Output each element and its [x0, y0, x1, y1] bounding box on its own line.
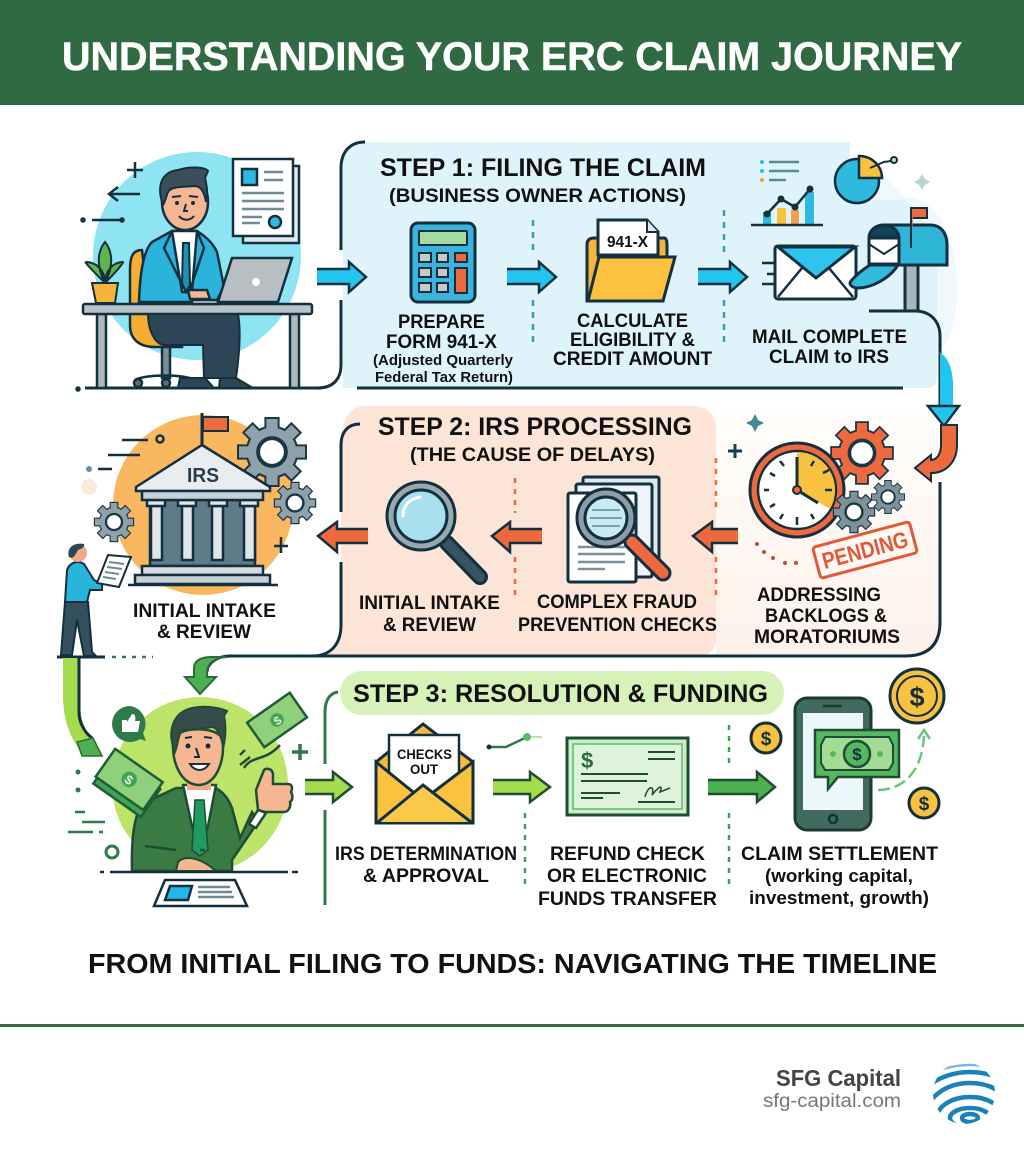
title: UNDERSTANDING YOUR ERC CLAIM JOURNEY	[62, 35, 962, 79]
hand on desk	[176, 858, 216, 871]
label: refund check: REFUND CHECK	[550, 844, 705, 865]
icon: coin left	[751, 723, 781, 753]
label: initial intake middle	[359, 593, 500, 636]
text: step 3: STEP 3: RESOLUTION & FUNDING	[353, 680, 768, 708]
arrow: to IRS	[318, 522, 368, 552]
label: claim settlement: investment, growth)	[749, 888, 929, 908]
cash left	[92, 749, 164, 817]
illustration: person reviewing	[57, 544, 131, 657]
hand and laptop	[188, 258, 292, 304]
sparkle	[914, 174, 930, 190]
label: determination: IRS DETERMINATION	[335, 844, 517, 865]
label: prepare form: PREPARE	[398, 312, 485, 333]
heading: step 1	[380, 154, 706, 207]
heading: step 1: STEP 1: FILING THE CLAIM	[380, 154, 706, 182]
label: calculate eligibility: CREDIT AMOUNT	[553, 349, 712, 370]
label: initial intake left	[133, 601, 276, 643]
label: determination	[335, 844, 517, 887]
label: prepare form: (Adjusted Quarterly	[373, 352, 514, 369]
text: checks out: CHECKS	[397, 746, 452, 762]
step 3 bracket line	[325, 692, 338, 905]
cash right	[247, 693, 307, 747]
tagline: FROM INITIAL FILING TO FUNDS: NAVIGATING THE TIMELINE	[88, 948, 937, 979]
paper	[97, 555, 131, 587]
connector lines step 2	[207, 424, 940, 672]
label: refund check	[538, 844, 717, 910]
heading: step 2	[378, 413, 692, 466]
icon: check	[567, 738, 688, 815]
subheading: step 1: (BUSINESS OWNER ACTIONS)	[389, 185, 686, 207]
icon: big coin	[890, 669, 944, 723]
body	[65, 562, 102, 602]
header banner	[0, 0, 1024, 105]
label: refund check: FUNDS TRANSFER	[538, 889, 717, 910]
logo: globe	[933, 1064, 995, 1124]
brand name	[763, 1065, 901, 1112]
tablet	[154, 880, 247, 906]
text: IRS: IRS	[187, 465, 219, 487]
icon: gray gear lower	[834, 492, 874, 532]
icon: envelope with notice	[376, 724, 473, 823]
label: calculate eligibility: CALCULATE	[577, 311, 688, 332]
label: determination: & APPROVAL	[363, 866, 489, 887]
divider	[525, 725, 729, 888]
head	[68, 544, 87, 562]
label: claim settlement: CLAIM SETTLEMENT	[741, 844, 938, 865]
icon: document	[233, 159, 299, 243]
heading pill: step 3	[340, 671, 784, 715]
panel: step 1 background	[343, 142, 937, 388]
arrow: to envelope	[305, 772, 352, 802]
dotted trail	[112, 656, 153, 658]
cash right: $	[271, 713, 285, 728]
divider	[533, 210, 724, 345]
label: calculate eligibility: ELIGIBILITY &	[570, 330, 695, 351]
jacket	[139, 231, 224, 302]
floor line	[57, 656, 105, 658]
marks	[76, 162, 143, 390]
heading: step 2: STEP 2: IRS PROCESSING	[378, 413, 692, 441]
stamp: pending: PENDING	[819, 526, 911, 574]
icon: folder with 941-X	[587, 220, 675, 301]
arrow: to check	[493, 772, 550, 802]
subheading: step 2: (THE CAUSE OF DELAYS)	[410, 444, 655, 466]
icon: pie chart	[835, 156, 897, 203]
arrow: down to step 3	[185, 657, 226, 694]
suit	[132, 785, 258, 871]
text: checks out	[397, 746, 452, 777]
panel: step 2 background	[320, 406, 716, 656]
icon: envelope	[762, 246, 856, 299]
arrow: calculator to folder	[507, 262, 556, 292]
connector lines step 1	[85, 142, 940, 405]
icon: gray gear	[872, 481, 904, 513]
small progress line	[486, 733, 542, 750]
neck	[175, 220, 195, 236]
marks	[81, 436, 288, 553]
label: mail claim: MAIL COMPLETE	[752, 327, 907, 348]
chair	[130, 250, 195, 387]
sparkle and plus	[728, 414, 764, 458]
icon: coin right	[909, 788, 939, 818]
icon: gear right	[275, 483, 315, 523]
label: fraud checks: COMPLEX FRAUD	[537, 592, 697, 613]
label: mail claim	[752, 327, 907, 368]
icon: flag	[202, 413, 228, 446]
trousers	[148, 314, 253, 388]
label: claim settlement	[741, 844, 938, 908]
icon: mailbox	[850, 208, 947, 311]
motion marks	[68, 744, 308, 858]
arrow: left green curve	[63, 658, 102, 756]
icon: coin right: $	[919, 794, 930, 815]
panel: step 2 pale background	[716, 410, 940, 656]
thumb bubble	[112, 706, 146, 742]
arrow: to documents	[693, 522, 738, 552]
brand url: sfg-capital.com	[763, 1091, 901, 1112]
label: initial intake left: & REVIEW	[157, 622, 251, 643]
arrow: into step 1	[317, 262, 366, 292]
icon: gear left	[95, 503, 133, 541]
cash bubble: $	[852, 745, 862, 764]
icon: coin left: $	[761, 729, 772, 750]
label: prepare form	[373, 312, 514, 386]
label: refund check: OR ELECTRONIC	[547, 866, 707, 887]
label: fraud checks: PREVENTION CHECKS	[518, 615, 717, 636]
cash left: $	[122, 772, 137, 788]
label: initial intake left: INITIAL INTAKE	[133, 601, 276, 622]
icon: phone with cash	[795, 698, 899, 830]
dots trail	[755, 542, 798, 565]
label: addressing backlogs	[754, 585, 900, 648]
label: fraud checks	[518, 592, 717, 636]
icon: orange gear	[832, 423, 892, 483]
icon: mini chart	[751, 160, 823, 225]
coin arrow	[878, 730, 930, 790]
label: prepare form: FORM 941-X	[386, 332, 497, 353]
icon: folder with 941-X: 941-X	[607, 234, 649, 251]
arrow: step 1 down to step 2	[928, 352, 959, 426]
label: prepare form: Federal Tax Return)	[375, 369, 513, 386]
arrow: to magnifier	[492, 522, 542, 552]
label: addressing backlogs: MORATORIUMS	[754, 627, 900, 648]
footer rule	[0, 1024, 1024, 1027]
building	[128, 445, 278, 585]
label: initial intake middle: INITIAL INTAKE	[359, 593, 500, 614]
desk line	[100, 871, 298, 873]
head	[171, 707, 227, 790]
arrow: curved orange	[915, 425, 957, 481]
panel: step 1 pale extension	[850, 160, 957, 355]
desk	[83, 304, 312, 388]
arrow: folder to envelope	[698, 262, 747, 292]
illustration: happy person with cash	[68, 693, 308, 906]
illustration: business owner at desk	[76, 152, 312, 390]
brand name: SFG Capital	[776, 1065, 901, 1091]
icon: documents under magnifier	[568, 477, 663, 582]
icon: clock	[750, 443, 844, 537]
illustration: IRS building	[81, 413, 315, 595]
divider	[515, 458, 716, 600]
icon: magnifying glass	[387, 482, 480, 577]
label: initial intake middle: & REVIEW	[383, 615, 476, 636]
label: addressing backlogs: ADDRESSING	[757, 585, 881, 606]
icon: plant	[86, 242, 123, 303]
label: claim settlement: (working capital,	[765, 866, 913, 886]
text: checks out: OUT	[410, 761, 438, 777]
icon: big coin: $	[909, 682, 925, 712]
legs	[61, 602, 96, 656]
icon: check: $	[581, 748, 593, 773]
label: mail claim: CLAIM to IRS	[769, 347, 889, 368]
icon: calculator	[411, 223, 475, 302]
arrow: to phone	[708, 772, 775, 802]
label: calculate eligibility	[553, 311, 712, 370]
head	[160, 167, 208, 230]
icon: big gear	[239, 419, 305, 485]
label: addressing backlogs: BACKLOGS &	[765, 606, 887, 627]
thumbs up hand	[249, 769, 292, 828]
